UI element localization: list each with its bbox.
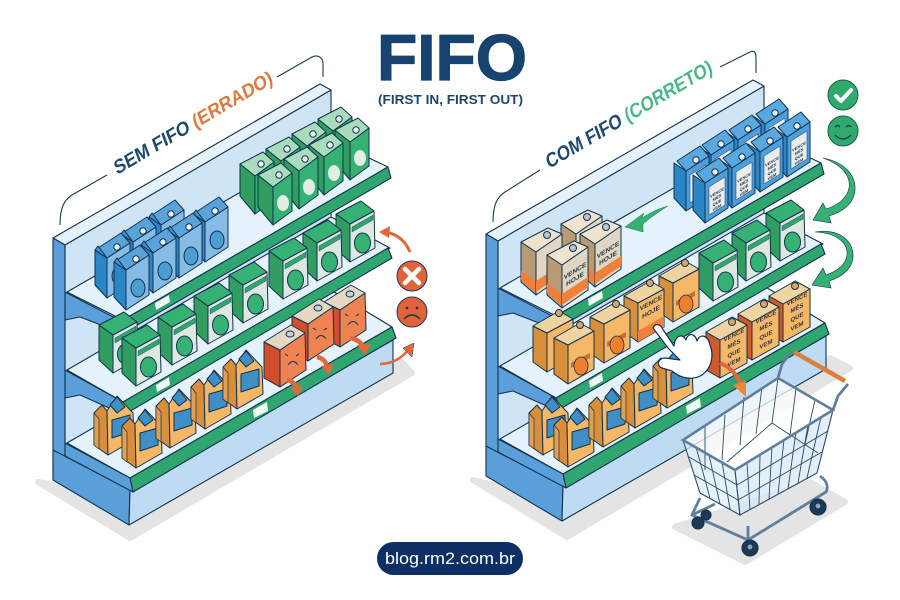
curved arrow up: [379, 226, 410, 252]
panel: com fifo (correto): [486, 51, 858, 556]
footer pill: url: blog.rm2.com.br: [385, 549, 515, 568]
heading bracket: left shelf: [60, 56, 323, 225]
icon: smile face: [828, 116, 858, 146]
top shelf products: blue cartons with labels: QUE: [795, 152, 803, 162]
middle shelf products: green boxes: [99, 201, 375, 386]
top shelf products: blue cartons with labels: [674, 99, 810, 223]
top shelf products: blue cartons with labels: QUE: [713, 198, 721, 208]
bottom shelf products: vence mes que vem boxes: QUE: [728, 347, 740, 360]
subtitle: (FIRST IN, FIRST OUT): [378, 93, 523, 107]
bottom shelf products: orange gable boxes: [94, 350, 263, 468]
middle shelf products: orange boxes: VENCE: [640, 294, 663, 313]
cart base frame: [692, 476, 827, 540]
top shelf products: tan vence hoje cartons: HOJE: [599, 249, 617, 267]
top shelf products: blue cartons with labels: MÊS: [713, 193, 721, 203]
icon: pointing hand: [653, 325, 712, 378]
top shelf products: blue cartons with labels: MÊS: [768, 162, 776, 172]
footer pill: url: [377, 542, 523, 575]
top shelf products: blue cartons with labels: MÊS: [740, 178, 748, 188]
top shelf products: blue cartons with labels: MÊS: [795, 147, 803, 157]
cart rim: [683, 378, 833, 470]
heading: com fifo: COM FIFO (CORRETO): [543, 56, 715, 174]
arrow: cartons move to front: [625, 206, 668, 232]
small orange arrows falling off shelf: [287, 338, 371, 396]
bottom shelf products: vence mes que vem boxes: QUE: [760, 329, 772, 342]
bottom shelf products: vence mes que vem boxes: VENCE: [724, 327, 744, 344]
curved arrow out: [380, 343, 414, 364]
top shelf products: blue cartons with labels: VEM: [795, 157, 804, 167]
bottom shelf products: vence mes que vem boxes: VEM: [728, 356, 740, 369]
top shelf products: blue cartons with labels: VENCE: [765, 155, 779, 168]
bottom shelf products: vence mes que vem boxes: QUE: [791, 311, 803, 324]
bottom shelf products: expired sad boxes: [264, 285, 366, 387]
top shelf products: blue cartons with labels: VEM: [740, 188, 749, 198]
top shelf products: blue cartons with labels: VENCE: [737, 171, 751, 184]
icon: x mark: [397, 261, 427, 291]
cart handle posts: [778, 351, 848, 410]
bottom shelf products: vence mes que vem boxes: [706, 281, 810, 378]
shelf unit: right: [486, 80, 829, 521]
heading: sem fifo: SEM FIFO (ERRADO): [111, 68, 276, 180]
middle shelf products: orange boxes: [533, 260, 699, 384]
cart basket faces: [683, 440, 740, 515]
top shelf products: blue cartons with labels: VEM: [713, 203, 722, 213]
bottom shelf products: vence mes que vem boxes: VENCE: [756, 309, 776, 326]
icon: check mark: [828, 80, 858, 110]
title: [377, 21, 527, 107]
cart basket front wires: [689, 417, 828, 510]
top shelf products: blue cartons: [95, 197, 228, 310]
floor shadows: [38, 358, 850, 562]
middle shelf products: orange boxes: HOJE: [642, 304, 660, 321]
icon: sad face: [397, 297, 427, 327]
top shelf products: tan vence hoje cartons: VENCE: [564, 260, 586, 282]
panel: sem fifo (errado): [53, 56, 427, 525]
cart basket fill: [683, 378, 833, 470]
title: FIFO: FIFO: [377, 21, 527, 94]
middle shelf products: green boxes: [699, 200, 805, 301]
top shelf products: green cartons: [240, 107, 369, 225]
bottom shelf products: orange gable boxes: [529, 349, 693, 467]
bottom shelf products: vence mes que vem boxes: MÊS: [791, 300, 803, 315]
heading bracket: right shelf: [493, 51, 756, 222]
arrow: middle shelf to bottom shelf: [812, 231, 853, 288]
top shelf products: tan vence hoje cartons: [521, 210, 621, 308]
cart basket back wires: [705, 378, 818, 470]
top shelf products: blue cartons with labels: VENCE: [710, 186, 724, 199]
top shelf products: blue cartons with labels: VENCE: [792, 140, 806, 153]
arrow: top shelf to middle shelf: [813, 158, 855, 223]
bottom shelf products: vence mes que vem boxes: MÊS: [728, 336, 740, 351]
bottom shelf products: vence mes que vem boxes: VEM: [760, 338, 772, 351]
shelf unit: left: [53, 84, 396, 525]
top shelf products: blue cartons with labels: QUE: [740, 183, 748, 193]
cart wheels: [692, 499, 826, 556]
bottom shelf products: vence mes que vem boxes: VEM: [791, 320, 803, 333]
cart handle: [794, 352, 845, 381]
top shelf products: tan vence hoje cartons: VENCE: [597, 239, 619, 261]
bottom shelf products: vence mes que vem boxes: VENCE: [787, 291, 807, 308]
arrow: orange, into cart: [720, 363, 746, 397]
shopping cart: [683, 351, 848, 556]
bottom shelf products: vence mes que vem boxes: MÊS: [760, 318, 772, 333]
top shelf products: blue cartons with labels: VEM: [768, 172, 777, 182]
top shelf products: tan vence hoje cartons: HOJE: [566, 270, 584, 288]
top shelf products: blue cartons with labels: QUE: [768, 167, 776, 177]
